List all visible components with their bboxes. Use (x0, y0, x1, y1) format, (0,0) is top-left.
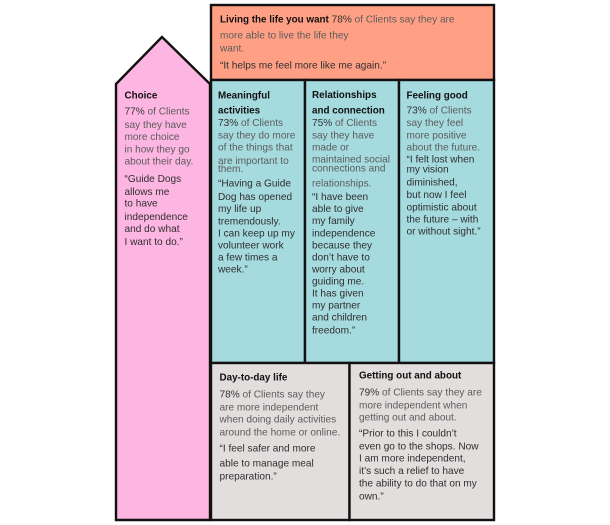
statistic: relationships and connection: relationships. (312, 179, 371, 190)
quote: getting out and about: own.” (359, 491, 384, 502)
statistic: living the life you want: want. (219, 44, 244, 55)
statistic: feeling good (406, 105, 480, 154)
quote: day-to-day life (220, 443, 316, 482)
statistic: feeling good: say they feel (406, 118, 463, 129)
panel: relationships and connection (305, 80, 399, 363)
heading: meaningful activities: activities (218, 105, 261, 116)
quote: choice (124, 174, 188, 248)
statistic: getting out and about (359, 387, 482, 424)
statistic: day-to-day life: are more independent (220, 403, 318, 414)
statistic: day-to-day life: 78% of Clients say they (220, 389, 326, 400)
grey background (211, 363, 350, 520)
statistic: relationships and connection: connections and (312, 163, 386, 174)
statistic: getting out and about: getting out and about. (359, 413, 457, 424)
quote: choice: “Guide Dogs (124, 174, 181, 185)
quote: living the life you want: “It helps me feel more like me again.” (220, 61, 386, 72)
quote: feeling good: diminished, (406, 177, 458, 188)
statistic: day-to-day life (218, 389, 340, 438)
quote: choice: independence (124, 212, 188, 223)
statistic: meaningful activities (218, 118, 296, 175)
statistic: relationships and connection: made or (312, 143, 350, 154)
quote: choice: and do what (124, 224, 180, 235)
quote: meaningful activities: I can keep up my (218, 229, 296, 240)
quote: getting out and about (359, 429, 479, 502)
heading: relationships and connection (312, 90, 385, 116)
statistic: feeling good: more positive (406, 131, 467, 142)
heading: day-to-day life: Day-to-day life (220, 373, 288, 384)
statistic: relationships and connection: say they have (312, 131, 375, 142)
quote: relationships and connection: don’t have to (312, 253, 370, 264)
quote: meaningful activities: Dog has opened (218, 192, 292, 203)
quote: meaningful activities: my life up (218, 204, 262, 215)
statistic: choice: about their day. (124, 157, 193, 168)
statistic: day-to-day life: when doing daily activities (218, 415, 336, 426)
statistic: living the life you want: Living the life you want 78% of Clients say they are (220, 15, 455, 26)
heading: relationships and connection: Relationships (312, 90, 377, 101)
panel: feeling good (399, 80, 494, 363)
quote: relationships and connection: worry about (311, 265, 365, 276)
statistic: living the life you want: more able to live the life they (220, 31, 349, 42)
statistic: choice: say they have (124, 120, 187, 131)
heading: meaningful activities (218, 91, 270, 116)
statistic: relationships and connection: maintained social (312, 155, 390, 166)
statistic: living the life you want (219, 15, 455, 55)
statistic: getting out and about: more independent when (359, 401, 467, 412)
panel: day-to-day life (211, 363, 350, 520)
heading: choice: Choice (124, 91, 158, 102)
quote: relationships and connection: my partner (312, 301, 361, 312)
teal background (211, 80, 305, 363)
quote: relationships and connection: and children (312, 313, 367, 324)
panel: choice (116, 37, 210, 520)
panel: meaningful activities (211, 80, 305, 363)
quote: feeling good: the future – with (406, 215, 478, 226)
quote: choice: I want to do.” (124, 237, 183, 248)
quote: choice: allows me (124, 187, 170, 198)
quote: getting out and about: even go to the shops. Now (359, 441, 479, 452)
quote: choice: to have (124, 199, 158, 210)
quote: meaningful activities (217, 179, 296, 276)
teal background (399, 80, 494, 363)
statistic: feeling good: 73% of Clients (406, 105, 472, 116)
heading: relationships and connection: and connection (312, 105, 385, 116)
statistic: meaningful activities: of the things that (218, 143, 293, 154)
quote: day-to-day life: preparation.” (220, 471, 277, 482)
statistic: meaningful activities: are important to (218, 156, 289, 167)
quote: meaningful activities: week.” (217, 265, 248, 276)
quote: relationships and connection (311, 192, 376, 336)
statistic: meaningful activities: say they do more (218, 131, 296, 142)
statistic: meaningful activities: 73% of Clients (218, 118, 283, 129)
quote: meaningful activities: a few times a (218, 253, 278, 264)
quote: day-to-day life: able to manage meal (220, 459, 314, 470)
heading: meaningful activities: Meaningful (218, 91, 270, 102)
quote: feeling good (406, 155, 481, 238)
heading: getting out and about: Getting out and about (359, 371, 462, 382)
statistic: relationships and connection (312, 118, 390, 190)
pink house shape (116, 37, 210, 520)
quote: getting out and about: “Prior to this I couldn’t (359, 429, 457, 440)
quote: feeling good: but now I feel (406, 190, 467, 201)
quote: relationships and connection: because they (312, 241, 373, 252)
quote: meaningful activities: volunteer work (218, 241, 285, 252)
quote: feeling good: my vision (406, 165, 449, 176)
quote: relationships and connection: able to give (312, 204, 364, 215)
quote: relationships and connection: guiding me. (312, 277, 364, 288)
quote: relationships and connection: independence (312, 229, 376, 240)
quote: feeling good: “I felt lost when (406, 155, 474, 166)
statistic: relationships and connection: 75% of Clients (312, 118, 377, 129)
quote: day-to-day life: “I feel safer and more (220, 443, 316, 454)
quote: relationships and connection: freedom.” (312, 325, 355, 336)
panel: getting out and about (350, 363, 494, 520)
heading: feeling good: Feeling good (406, 91, 468, 102)
quote: meaningful activities: tremendously. (218, 217, 281, 228)
quote: getting out and about: it’s such a relief to have (359, 466, 465, 477)
statistic: choice: more choice (124, 132, 180, 143)
quote: getting out and about: I am more independent, (359, 453, 466, 464)
quote: relationships and connection: It has given (312, 289, 364, 300)
statistic: choice: 77% of Clients (124, 107, 190, 118)
statistic: choice (124, 107, 193, 168)
quote: meaningful activities: “Having a Guide (218, 179, 291, 190)
teal background (305, 80, 399, 363)
statistic: day-to-day life: around the home or online. (220, 427, 340, 438)
statistic: meaningful activities: them. (218, 164, 243, 175)
quote: feeling good: optimistic about (406, 203, 477, 214)
statistic: feeling good: about the future. (406, 143, 480, 154)
quote: getting out and about: the ability to do that on my (359, 479, 478, 490)
quote: relationships and connection: my family (312, 216, 356, 227)
quote: feeling good: or without sight.” (406, 227, 481, 238)
statistic: getting out and about: 79% of Clients say they are (359, 387, 482, 398)
quote: relationships and connection: “I have been (312, 192, 368, 203)
orange background (211, 5, 494, 80)
grey background (350, 363, 494, 520)
panel: living the life you want (211, 5, 494, 80)
statistic: choice: in how they go (124, 145, 190, 156)
